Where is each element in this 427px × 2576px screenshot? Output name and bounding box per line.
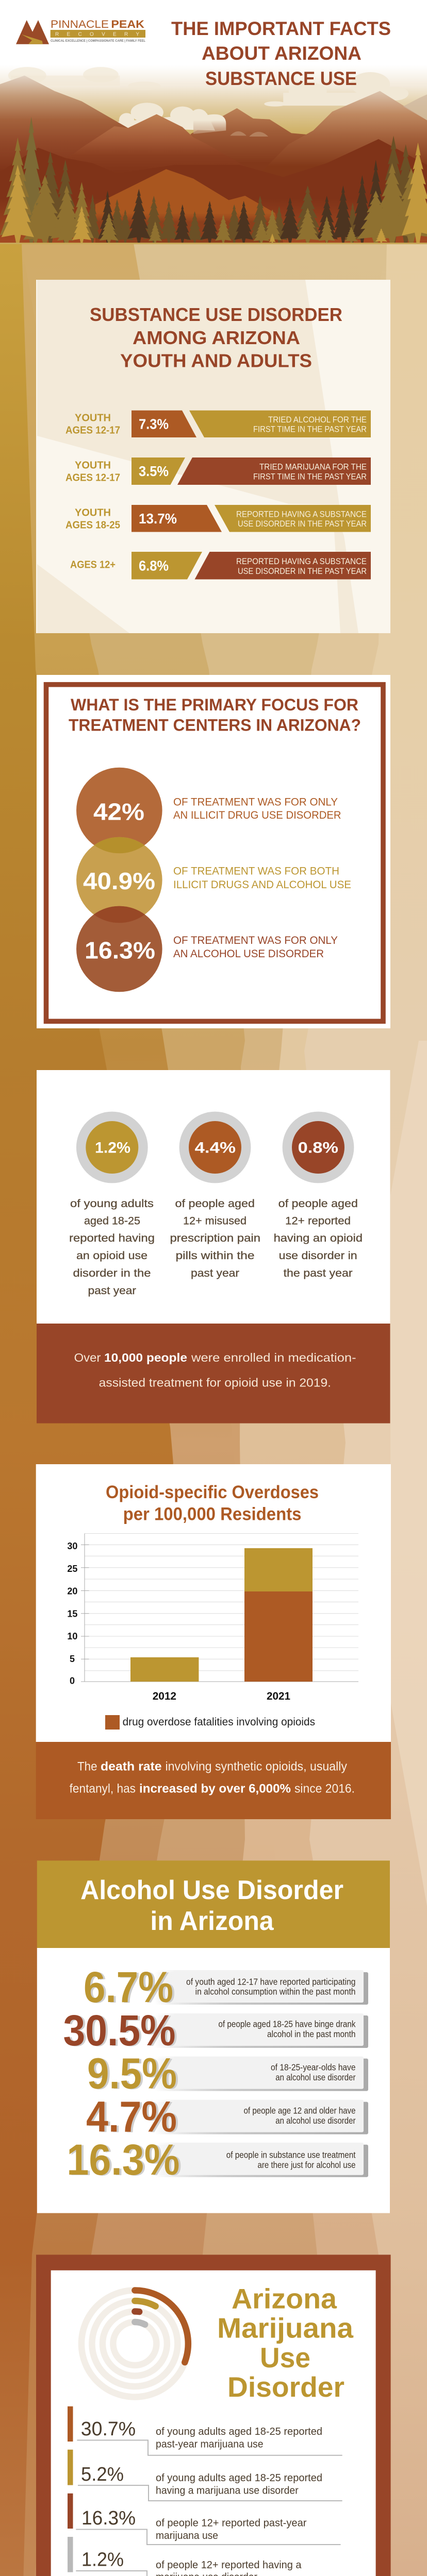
overlapping percentage circles xyxy=(76,768,162,992)
title: SUBSTANCE USE xyxy=(205,68,357,89)
bar chart: 2021 xyxy=(267,1690,290,1702)
stat: 1.2% xyxy=(69,1112,155,1297)
stat: 4.4%: prescription pain xyxy=(170,1232,260,1244)
heading xyxy=(106,1482,319,1524)
callout: death rate: death rate xyxy=(101,1760,162,1774)
row: 6.8% ages 12+: USE DISORDER IN THE PAST YEAR xyxy=(238,566,367,576)
callout: 10,000 people enrolled xyxy=(37,1324,390,1423)
row: 13.7% youth 18-25: USE DISORDER IN THE PAST YEAR xyxy=(238,519,367,529)
panel: opioid-specific overdoses xyxy=(36,1464,391,1819)
row: 4.7% xyxy=(86,2093,368,2142)
heading: TREATMENT CENTERS IN ARIZONA? xyxy=(69,716,361,735)
row: 13.7% youth 18-25: AGES 18-25 xyxy=(65,519,120,531)
callout: death rate: increased by over 6,000% xyxy=(139,1782,291,1796)
stat: 0.8%: the past year xyxy=(284,1267,353,1279)
stat: 30.7%: 30.7% xyxy=(81,2418,136,2440)
row: 13.7% youth 18-25: REPORTED HAVING A SUBSTANCE xyxy=(236,510,367,519)
stat: 1.2%: an opioid use xyxy=(76,1250,147,1262)
row: 6.7%: in alcohol consumption within the past month xyxy=(195,1987,356,1997)
row: 9.5%: 9.5% xyxy=(87,2049,177,2098)
callout: 10,000 people enrolled: 10,000 people xyxy=(104,1351,187,1364)
radial ring chart xyxy=(81,2291,188,2397)
row: 4.7%: an alcohol use disorder xyxy=(275,2115,356,2126)
circle descriptions: AN ALCOHOL USE DISORDER xyxy=(173,947,324,960)
panel: opioid use statistics xyxy=(37,1070,390,1423)
heading: Marijuana xyxy=(217,2312,353,2344)
stat: 16.3%: 16.3% xyxy=(81,2507,136,2529)
title: ABOUT ARIZONA xyxy=(202,43,362,64)
row: 6.7%: 6.7% xyxy=(86,1963,175,2012)
row: 3.5% tried marijuana xyxy=(65,457,371,485)
stat: 4.4%: pills within the xyxy=(175,1250,255,1262)
row: 30.5% xyxy=(63,2006,368,2055)
stat: 1.2%: past year xyxy=(88,1285,136,1297)
callout: death rate: since 2016. xyxy=(294,1782,355,1796)
stat: 1.2%: 1.2% xyxy=(81,2549,124,2571)
stat: 30.7% xyxy=(68,2406,342,2455)
callout: death rate: fentanyl, has xyxy=(70,1782,136,1796)
row: 30.5%: 30.5% xyxy=(65,2007,177,2055)
circle descriptions xyxy=(173,795,351,960)
callout: 10,000 people enrolled: were enrolled in medication- xyxy=(191,1351,356,1364)
logo: Pinnacle Peak Recovery (header): PEAK xyxy=(111,19,144,30)
stat: 1.2%: aged 18-25 xyxy=(84,1215,140,1227)
stat: 4.4%: 12+ misused xyxy=(183,1215,247,1227)
stat: 0.8%: use disorder in xyxy=(279,1250,357,1262)
row: 6.8% ages 12+: REPORTED HAVING A SUBSTANCE xyxy=(236,556,367,566)
row: 3.5% tried marijuana: YOUTH xyxy=(75,460,111,471)
stat: 0.8%: of people aged xyxy=(278,1198,358,1210)
stat: 0.8% xyxy=(274,1112,363,1279)
overlapping percentage circles: 40.9% xyxy=(83,868,155,894)
heading: Disorder xyxy=(227,2371,344,2403)
callout: 10,000 people enrolled: assisted treatment for opioid use in 2019. xyxy=(99,1376,331,1389)
heading: AMONG ARIZONA xyxy=(133,327,300,348)
row: 16.3%: are there just for alcohol use xyxy=(258,2160,356,2170)
stat: 0.8%: having an opioid xyxy=(274,1232,363,1244)
circle descriptions: ILLICIT DRUGS AND ALCOHOL USE xyxy=(173,878,351,891)
stat: 1.2% xyxy=(68,2537,340,2576)
heading: Opioid-specific Overdoses xyxy=(106,1482,319,1502)
bar chart: 2012 xyxy=(153,1690,176,1702)
row: 16.3%: of people in substance use treatment xyxy=(226,2149,356,2160)
callout: death rate: The xyxy=(77,1760,97,1774)
heading: Arizona xyxy=(232,2283,337,2315)
stat: 1.2%: of people 12+ reported having a xyxy=(156,2559,302,2571)
row: 16.3%: 16.3% xyxy=(69,2136,182,2184)
logo: Pinnacle Peak Recovery (header) xyxy=(16,19,145,44)
panel: alcohol use disorder in Arizona xyxy=(37,1860,390,2213)
title: THE IMPORTANT FACTS xyxy=(171,18,391,39)
bar chart: 10 xyxy=(67,1631,77,1641)
circle descriptions: AN ILLICIT DRUG USE DISORDER xyxy=(173,809,341,821)
heading xyxy=(90,304,342,371)
row: 6.7%: 6.7% xyxy=(84,1963,173,2011)
stat: 16.3%: of people 12+ reported past-year xyxy=(156,2517,307,2529)
row: 30.5%: 30.5% xyxy=(63,2006,175,2055)
row: 13.7% youth 18-25 xyxy=(65,505,371,532)
heading xyxy=(217,2283,353,2403)
row: 4.7%: of people age 12 and older have xyxy=(243,2106,356,2116)
row: 4.7%: 4.7% xyxy=(88,2093,179,2142)
title xyxy=(171,18,391,89)
row: 3.5% tried marijuana: 3.5% xyxy=(139,463,169,479)
row: 6.7% xyxy=(84,1963,368,2012)
stat: 5.2%: 5.2% xyxy=(81,2464,124,2485)
row: 3.5% tried marijuana: AGES 12-17 xyxy=(65,472,120,483)
row: 6.8% ages 12+: AGES 12+ xyxy=(70,560,116,571)
bar chart: 5 xyxy=(70,1654,75,1664)
stat: 30.7%: past-year marijuana use xyxy=(156,2438,264,2450)
stat: 0.8%: 12+ reported xyxy=(285,1215,351,1227)
row: 16.3% xyxy=(67,2136,368,2184)
logo: Pinnacle Peak Recovery (header): RECOVERY xyxy=(55,31,139,37)
row: 9.5%: of 18-25-year-olds have xyxy=(271,2062,356,2073)
overlapping percentage circles: 16.3% xyxy=(85,937,155,964)
overlapping percentage circles: 42% xyxy=(93,799,144,825)
row: 9.5%: an alcohol use disorder xyxy=(275,2072,356,2082)
heading: per 100,000 Residents xyxy=(123,1504,301,1524)
stat: 1.2%: of young adults xyxy=(70,1198,154,1210)
bar chart: 0 xyxy=(70,1676,75,1686)
stat: 4.4%: 4.4% xyxy=(195,1140,236,1157)
row: 9.5%: 9.5% xyxy=(89,2050,179,2098)
bar chart: 20 xyxy=(67,1586,77,1596)
stat: 16.3%: marijuana use xyxy=(156,2530,218,2541)
panel: Arizona marijuana use disorder xyxy=(36,2255,391,2576)
stat: 0.8%: 0.8% xyxy=(298,1140,338,1157)
row: 3.5% tried marijuana: TRIED MARIJUANA FOR THE xyxy=(259,462,367,472)
row: 7.3% tried alcohol: TRIED ALCOHOL FOR THE xyxy=(268,415,367,425)
bar chart xyxy=(67,1533,358,1702)
row: 6.8% ages 12+: 6.8% xyxy=(139,558,169,574)
circle descriptions: OF TREATMENT WAS FOR ONLY xyxy=(173,795,338,808)
callout: 10,000 people enrolled: Over xyxy=(74,1351,101,1364)
row: 4.7%: 4.7% xyxy=(86,2093,177,2141)
row: 13.7% youth 18-25: 13.7% xyxy=(139,511,177,527)
stat: 30.7%: of young adults aged 18-25 reported xyxy=(156,2426,322,2437)
circle descriptions: OF TREATMENT WAS FOR BOTH xyxy=(173,865,339,877)
stat: 4.4%: past year xyxy=(191,1267,239,1279)
heading band: Alcohol Use Disorder xyxy=(80,1875,343,1905)
legend: drug overdose fatalities involving opioids xyxy=(123,1716,315,1728)
callout: death rate xyxy=(36,1742,391,1819)
logo: Pinnacle Peak Recovery (header): CLINICAL EXCELLENCE | COMPASSIONATE CARE | FAMILY FEEL xyxy=(51,39,145,43)
stat: 5.2%: having a marijuana use disorder xyxy=(156,2485,299,2497)
row: 3.5% tried marijuana: FIRST TIME IN THE PAST YEAR xyxy=(253,471,367,481)
ground strip xyxy=(0,243,427,244)
stat: 16.3% xyxy=(68,2494,340,2545)
stat: 4.4%: of people aged xyxy=(175,1198,255,1210)
heading band xyxy=(37,1860,390,1948)
row: 7.3% tried alcohol: 7.3% xyxy=(139,416,169,432)
row: 6.8% ages 12+ xyxy=(70,552,371,579)
heading: Use xyxy=(260,2342,310,2374)
row: 7.3% tried alcohol xyxy=(65,411,371,437)
heading band: in Arizona xyxy=(150,1906,274,1936)
heading xyxy=(69,696,361,735)
row: 30.5%: alcohol in the past month xyxy=(267,2029,356,2039)
bar chart: 30 xyxy=(67,1541,77,1551)
heading: WHAT IS THE PRIMARY FOCUS FOR xyxy=(71,696,358,714)
panel: substance use disorder among youth and adults xyxy=(36,280,390,633)
row: 7.3% tried alcohol: FIRST TIME IN THE PAST YEAR xyxy=(253,424,367,434)
bar chart: 25 xyxy=(67,1564,77,1574)
stat: 1.2%: 1.2% xyxy=(95,1140,130,1157)
row: 13.7% youth 18-25: YOUTH xyxy=(75,507,111,518)
logo: Pinnacle Peak Recovery (header): PINNACLE xyxy=(51,19,109,30)
heading: YOUTH AND ADULTS xyxy=(120,350,312,371)
stat: 5.2%: of young adults aged 18-25 reported xyxy=(156,2472,322,2484)
stat: 1.2%: disorder in the xyxy=(73,1267,151,1279)
stat: 4.4% xyxy=(170,1112,260,1279)
stat: 1.2%: reported having xyxy=(69,1232,155,1244)
row: 7.3% tried alcohol: YOUTH xyxy=(75,412,111,423)
panel: primary focus for treatment centers xyxy=(37,675,390,1028)
callout: death rate: involving synthetic opioids, usually xyxy=(165,1760,347,1774)
row: 30.5%: of people aged 18-25 have binge drank xyxy=(218,2019,356,2029)
row: 16.3%: 16.3% xyxy=(67,2136,179,2184)
header: mountain illustration xyxy=(0,65,427,243)
heading: SUBSTANCE USE DISORDER xyxy=(90,304,342,325)
row: 7.3% tried alcohol: AGES 12-17 xyxy=(65,425,120,436)
circle descriptions: OF TREATMENT WAS FOR ONLY xyxy=(173,934,338,946)
bar chart: 15 xyxy=(67,1609,77,1619)
row: 9.5% xyxy=(87,2049,368,2098)
stat: 5.2% xyxy=(68,2450,342,2501)
row: 6.7%: of youth aged 12-17 have reported participating xyxy=(186,1976,356,1987)
